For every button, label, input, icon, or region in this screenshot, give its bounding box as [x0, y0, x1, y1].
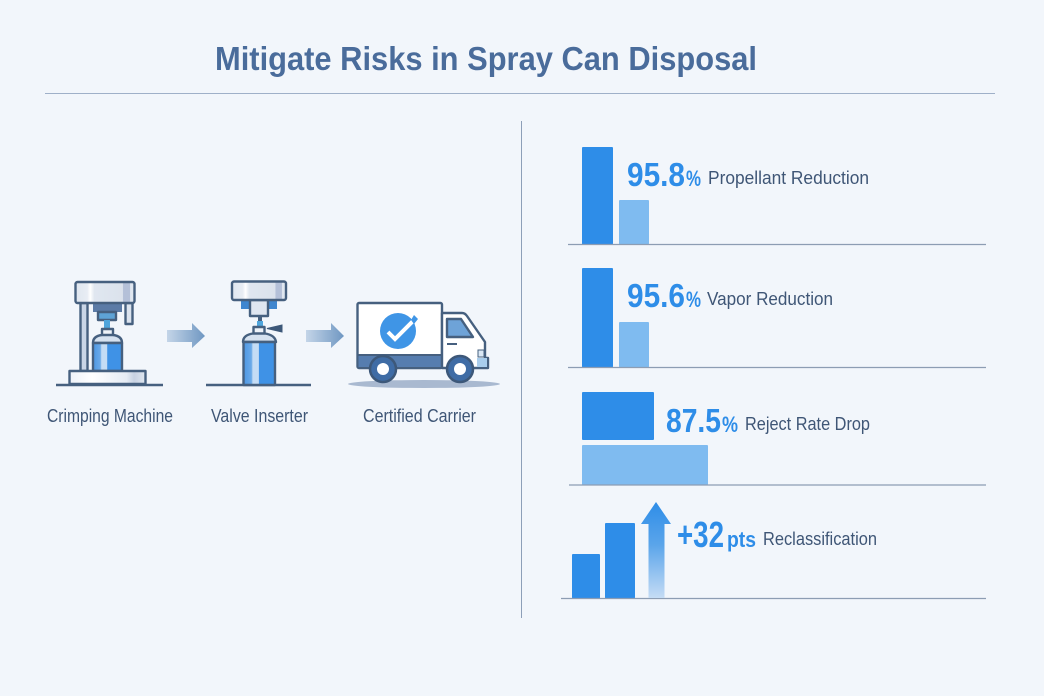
value: 95.6: 95.6 [627, 277, 685, 314]
bar chart: vapor [568, 268, 986, 368]
label: reclassification: Reclassification [763, 529, 877, 549]
arrow: upward trend [641, 502, 671, 598]
icon: valve inserter [206, 282, 311, 385]
unit: percent: % [686, 287, 701, 312]
unit: percent: % [686, 166, 701, 191]
unit: pts: pts [727, 527, 756, 552]
panel: metric reclassification [561, 502, 986, 598]
panel: process flow [47, 282, 500, 426]
label: reject rate drop: Reject Rate Drop [745, 414, 870, 434]
bar chart: reclassification [561, 523, 986, 598]
label: vapor reduction: Vapor Reduction [707, 289, 833, 309]
unit: percent: % [722, 412, 738, 437]
icon: delivery truck [348, 303, 500, 388]
arrow: crimping to valve [167, 323, 205, 348]
arrow: valve to carrier [306, 323, 344, 348]
label: propellant reduction: Propellant Reduction [708, 168, 869, 188]
title: Mitigate Risks in Spray Can Disposal [215, 40, 757, 77]
panel: metric vapor reduction [568, 268, 986, 368]
value: 95.8: 95.8 [627, 156, 685, 193]
icon: crimping machine [56, 282, 163, 385]
panel: metric propellant reduction [568, 147, 986, 244]
label: crimping machine: Crimping Machine [47, 406, 173, 426]
value: +32: +32 [677, 514, 724, 555]
panel: metric reject rate drop [569, 392, 986, 485]
value: 87.5: 87.5 [666, 402, 721, 439]
label: valve inserter: Valve Inserter [211, 406, 308, 426]
label: certified carrier: Certified Carrier [363, 406, 476, 426]
bar chart: reject rate [569, 392, 986, 485]
bar chart: propellant [568, 147, 986, 244]
